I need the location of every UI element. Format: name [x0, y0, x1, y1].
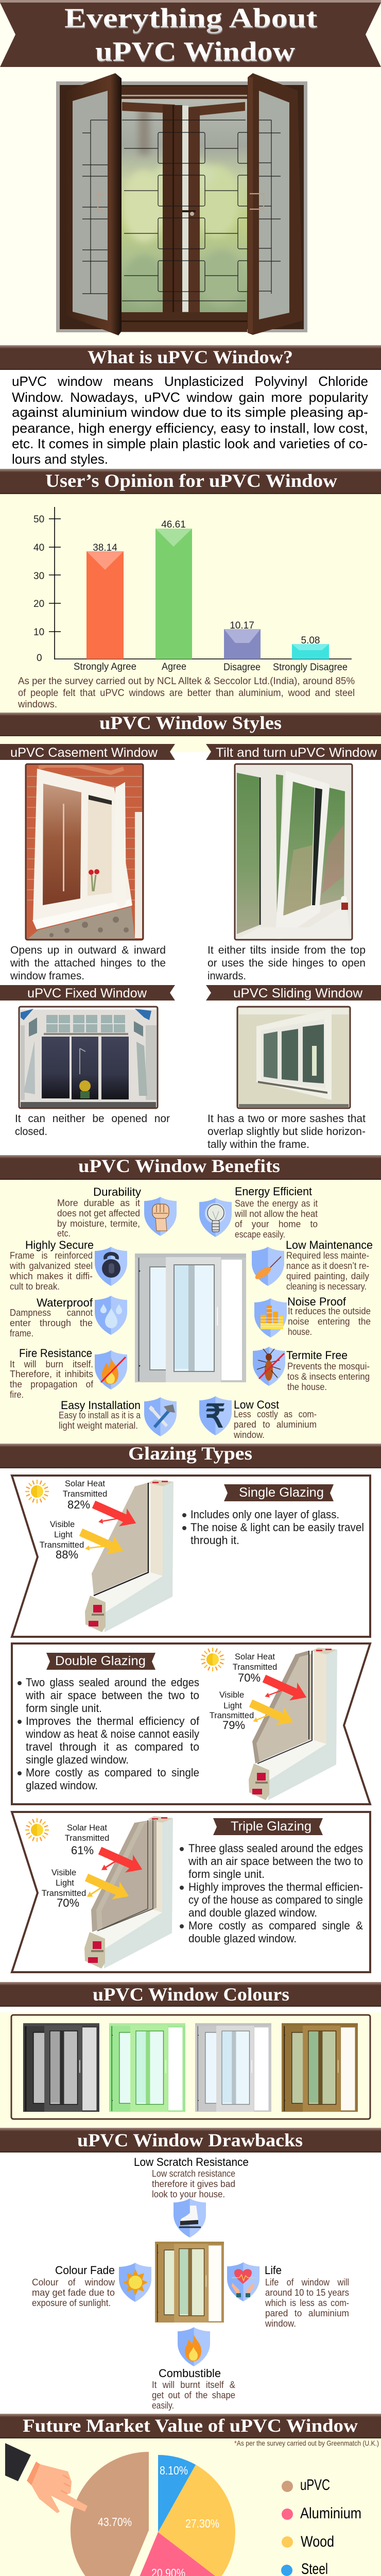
ribbon: Double Glazing — [46, 1653, 155, 1670]
pie chart: market share: 27.30% — [185, 2517, 219, 2530]
bullets: triple glazing: and double glazed window. — [188, 1906, 317, 1919]
icon: light bulb — [205, 1203, 226, 1232]
benefit: Energy Efficient: escape easily. — [235, 1229, 285, 1240]
cream notch between ribbons — [170, 744, 211, 752]
bar chart: user opinion — [33, 507, 352, 673]
ribbon: Tilt and turn uPVC Window: Tilt and turn uPVC Window — [216, 745, 377, 760]
panel: benefits background — [0, 1180, 381, 1444]
benefit: Energy Efficient: Energy Efficient — [235, 1185, 312, 1198]
drawback: Life — [227, 2262, 349, 2329]
section heading: uPVC Window Styles: uPVC Window Styles — [99, 713, 282, 733]
caption: fixed: It can neither be opened nor — [15, 1113, 170, 1125]
section heading: uPVC Window Colours — [0, 1982, 381, 2007]
icon: duster — [253, 1257, 281, 1281]
y axis with ticks: 40 — [33, 543, 44, 553]
image: gold sliding window (drawbacks centre) — [155, 2242, 224, 2323]
drawback: Combustible: easily. — [152, 2400, 174, 2411]
pie chart: market share: 8.10% — [160, 2464, 188, 2477]
benefit: Fire Resistance: the propagation of — [10, 1379, 94, 1389]
drawback: Low Scratch Resistance: look to your house. — [152, 2189, 225, 2199]
label: visible light 79%: Light — [223, 1701, 242, 1710]
benefit: Low Maintenance: cleaning is necessary. — [286, 1281, 367, 1292]
label: visible light 70%: 70% — [57, 1896, 79, 1909]
y axis with ticks — [33, 507, 352, 664]
caption: fixed: closed. — [15, 1126, 47, 1138]
label: visible light 70% — [42, 1868, 86, 1909]
benefit: Low Cost: pared to aluminium — [234, 1419, 317, 1430]
benefit: Noise Proof: Noise Proof — [287, 1295, 347, 1308]
label: visible light 88%: 88% — [56, 1548, 78, 1561]
icon: sun — [25, 1480, 49, 1503]
benefit: Highly Secure: Highly Secure — [25, 1239, 94, 1251]
caption: tilt and turn: inwards. — [207, 970, 246, 982]
label: visible light 79% — [210, 1690, 254, 1732]
icon: fist — [152, 1204, 169, 1231]
drawback: Colour Fade: exposure of sunlight. — [32, 2298, 111, 2308]
background: top ivory — [0, 0, 381, 345]
title banner — [0, 0, 381, 67]
section heading: What is uPVC Window? — [0, 345, 381, 370]
bullets: triple glazing: with an air space between the two to — [188, 1855, 363, 1868]
section heading: What is uPVC Window?: What is uPVC Window? — [88, 347, 293, 367]
benefit: Low Maintenance: Low Maintenance — [286, 1239, 373, 1251]
benefit: Highly Secure: with galvanized steel — [9, 1261, 93, 1271]
ribbon: Single Glazing — [224, 1484, 334, 1501]
icon: hammer and wrench — [149, 1404, 175, 1427]
bar: Agree 46.61: Agree — [162, 662, 186, 672]
ribbon: uPVC Casement Window: uPVC Casement Window — [10, 745, 158, 760]
benefit: Waterproof: Waterproof — [37, 1296, 93, 1309]
drawback: Colour Fade: Colour Fade — [55, 2264, 115, 2277]
legend: uPVC — [300, 2477, 330, 2494]
benefit: Easy Installation: light weight material. — [59, 1420, 138, 1431]
bullets: triple glazing: form single unit. — [188, 1868, 265, 1880]
drawback: Colour Fade: may get fade due to — [32, 2287, 115, 2298]
survey note: As per the survey carried out by NCL Alltek & Seccolor Ltd.(India), around 85% — [18, 676, 355, 687]
icon: heart in hands — [232, 2269, 255, 2297]
bullets: single glazing: The noise & light can be easily travel — [190, 1521, 364, 1534]
bar: Agree 46.61: 46.61 — [161, 519, 186, 530]
benefit: Low Cost: window. — [233, 1430, 265, 1440]
label: solar heat 82%: Transmitted — [63, 1489, 107, 1499]
icon: sun — [25, 1818, 49, 1842]
bar: Disagree 10.17: 10.17 — [230, 620, 254, 631]
drawback: Colour Fade — [32, 2263, 151, 2308]
survey note: of people felt that uPVC windows are better than aluminium, wood and steel — [18, 688, 355, 699]
ribbon: Single Glazing: Single Glazing — [239, 1485, 324, 1500]
benefit: Noise Proof: noise entering the — [288, 1316, 371, 1327]
window: green — [109, 2023, 185, 2112]
benefit: Low Maintenance — [252, 1239, 373, 1292]
benefit: Fire Resistance — [10, 1347, 127, 1400]
bullets: triple glazing: Three glass sealed around the edges — [188, 1842, 363, 1855]
window: white grey — [195, 2023, 271, 2112]
benefit: Highly Secure: which makes it diffi- — [9, 1271, 93, 1281]
benefit: Fire Resistance: fire. — [10, 1389, 24, 1400]
caption: casement — [10, 944, 166, 982]
label: visible light 79%: Visible — [219, 1690, 244, 1700]
drawback: Life: which is less as com- — [265, 2298, 349, 2308]
window: black — [23, 2023, 99, 2112]
bullets: double glazing: More costly as compared to single — [26, 1766, 199, 1779]
label: visible light 88%: Visible — [50, 1520, 75, 1529]
caption: casement: with the attached hinges to the — [10, 957, 166, 969]
section heading: Future Market Value — [0, 2414, 381, 2438]
label: solar heat 82%: Solar Heat — [65, 1479, 105, 1488]
benefit: Noise Proof — [254, 1295, 371, 1337]
panel: triple glazing — [12, 1812, 370, 1972]
section heading: uPVC Window Benefits — [0, 1155, 381, 1180]
drawback: Low Scratch Resistance: Low scratch resistance — [152, 2168, 235, 2179]
benefit: Easy Installation: Easy to install as it is a — [59, 1410, 141, 1420]
bar: Strongly Agree 38.14: 38.14 — [93, 543, 117, 553]
section heading: uPVC Window Styles — [0, 713, 381, 736]
drawback: Colour Fade: Colour of window — [32, 2277, 115, 2287]
bullets: triple glazing: Highly improves the thermal efficien- — [188, 1880, 363, 1893]
ribbon: Triple Glazing: Triple Glazing — [231, 1819, 311, 1834]
bullets: double glazing: Improves the thermal efficiency of — [26, 1715, 200, 1727]
benefit: Low Cost: Less costly as com- — [234, 1409, 317, 1419]
title banner: Everything About — [64, 3, 317, 33]
intro paragraph: Window. Nowadays, uPVC window gain more popularity — [12, 389, 368, 405]
icon: fire crossed out — [101, 1357, 126, 1384]
panel: colours background — [0, 2012, 381, 2128]
benefit: Noise Proof: house. — [288, 1327, 312, 1337]
section heading: uPVC Window Benefits: uPVC Window Benefits — [78, 1156, 280, 1176]
icon: kettlebell lock — [102, 1254, 120, 1278]
bullets: double glazing — [18, 1676, 200, 1792]
photo: sliding window — [237, 1007, 350, 1108]
section heading: User's Opinion: User’s Opinion for uPVC Window — [45, 470, 337, 491]
label: visible light 88% — [40, 1520, 84, 1561]
legend — [281, 2477, 361, 2576]
benefit: Energy Efficient: Save the energy as it — [235, 1198, 318, 1209]
pie chart: market share: 43.70% — [98, 2515, 132, 2529]
label: visible light 70%: Transmitted — [42, 1889, 86, 1898]
benefit: Fire Resistance: Fire Resistance — [19, 1347, 92, 1360]
section heading: uPVC Window Drawbacks: uPVC Window Drawbacks — [77, 2130, 303, 2150]
benefit: Durability: etc. — [57, 1228, 71, 1239]
bar: Strongly Disagree 5.08 — [273, 635, 348, 673]
ribbon: uPVC Sliding Window — [206, 985, 381, 1001]
section heading: uPVC Window Colours: uPVC Window Colours — [93, 1984, 289, 2005]
benefit: Waterproof: frame. — [10, 1328, 33, 1338]
intro paragraph: against aluminium window due to its simple pleasing ap- — [12, 404, 368, 420]
drawback: Life: Life of window will — [265, 2277, 349, 2287]
panel: colour swatches box — [11, 2015, 370, 2119]
icon: rupee: ₹ — [205, 1399, 226, 1434]
bullets: double glazing: with air space between the two to — [25, 1689, 199, 1702]
bullets: triple glazing — [180, 1842, 363, 1945]
photo: casement window in brick wall — [26, 764, 143, 940]
benefit: Termite Free — [253, 1347, 370, 1392]
bullets: triple glazing: More costly as compared single & — [188, 1919, 363, 1932]
bullets: double glazing: form single unit. — [26, 1702, 102, 1715]
section heading: Future Market Value: Future Market Value of uPVC Window — [23, 2415, 358, 2436]
drawback: Combustible — [152, 2327, 235, 2411]
benefit: Fire Resistance: Therefore, it inhibits — [10, 1369, 93, 1379]
benefit: Termite Free: Termite Free — [286, 1349, 348, 1362]
bar: Strongly Disagree 5.08: Strongly Disagree — [273, 662, 348, 673]
caption: casement: Opens up in outward & inward — [10, 944, 166, 956]
drawback: Low Scratch Resistance — [134, 2156, 249, 2238]
benefit: Highly Secure — [9, 1239, 127, 1292]
label: solar heat 61%: 61% — [71, 1844, 94, 1857]
icon: termite crossed out — [257, 1349, 284, 1381]
label: solar heat 61%: Solar Heat — [67, 1823, 107, 1833]
legend: Wood — [301, 2533, 334, 2550]
benefit: Waterproof: Dampness cannot — [10, 1308, 93, 1318]
bar: Strongly Disagree 5.08: 5.08 — [301, 635, 320, 646]
title banner: uPVC Window — [95, 36, 295, 67]
benefit: Low Cost — [199, 1396, 317, 1440]
bar: Strongly Agree 38.14 — [74, 543, 136, 672]
bullets: triple glazing: double glazed window. — [188, 1932, 297, 1945]
benefit: Energy Efficient: will not allow the heat — [234, 1209, 318, 1219]
survey note — [18, 676, 355, 710]
ribbon: uPVC Fixed Window — [0, 985, 175, 1001]
section heading: Glazing Types: Glazing Types — [128, 1443, 252, 1464]
caption: tilt and turn — [207, 944, 366, 982]
panel: single glazing — [12, 1476, 370, 1637]
label: solar heat 70%: Solar Heat — [235, 1652, 275, 1662]
icon: water drops — [100, 1304, 122, 1328]
benefit: Low Maintenance: Required less mainte- — [286, 1250, 369, 1261]
benefit: Durability: by moisture, termite, — [57, 1218, 140, 1229]
ribbon: Double Glazing: Double Glazing — [55, 1654, 146, 1668]
drawback: Life: Life — [265, 2264, 282, 2277]
benefit: Easy Installation: Easy Installation — [61, 1399, 141, 1412]
label: visible light 88%: Light — [54, 1530, 73, 1539]
section heading: Glazing Types — [0, 1443, 381, 1468]
label: solar heat 82%: 82% — [67, 1498, 90, 1511]
cream band under styles heading — [0, 736, 381, 744]
legend: Aluminium — [300, 2505, 361, 2522]
label: solar heat 70%: 70% — [238, 1671, 261, 1684]
bar: Strongly Agree 38.14: Strongly Agree — [74, 662, 136, 672]
bullets: double glazing: Two glass sealed around the edges — [26, 1676, 199, 1689]
drawback: Low Scratch Resistance: Low Scratch Resistance — [134, 2156, 249, 2168]
caption: sliding: It has a two or more sashes that — [207, 1113, 366, 1125]
benefit: Easy Installation — [59, 1397, 177, 1436]
ribbon: uPVC Fixed Window: uPVC Fixed Window — [27, 986, 147, 1001]
icon: pointing hand — [5, 2443, 88, 2513]
caption: tilt and turn: It either tilts inside from the top — [207, 944, 366, 956]
benefit: Low Maintenance: quired painting, daily — [286, 1271, 369, 1281]
label: visible light 70%: Visible — [51, 1868, 76, 1877]
hero image: open brown uPVC casement window — [56, 73, 307, 335]
drawback: Combustible: get out of the shape — [152, 2390, 235, 2400]
benefit: Fire Resistance: It will burn itself. — [10, 1359, 93, 1369]
bullets: double glazing: single glazed window. — [26, 1753, 129, 1766]
bullets: double glazing: travel through it as compared to — [26, 1740, 199, 1753]
intro paragraph: etc. It comes in simple plain plastic look and varieties of co- — [12, 436, 368, 451]
bullets: single glazing: through it. — [190, 1534, 239, 1547]
ribbon: uPVC Sliding Window: uPVC Sliding Window — [233, 986, 363, 1001]
label: solar heat 70% — [233, 1652, 277, 1684]
survey note: windows. — [18, 699, 57, 710]
label: visible light 88%: Transmitted — [40, 1540, 84, 1550]
drawback: Combustible: Combustible — [159, 2367, 221, 2380]
label: solar heat 70%: Transmitted — [233, 1663, 277, 1672]
benefit: Energy Efficient — [199, 1185, 318, 1240]
label: visible light 70%: Light — [56, 1878, 74, 1888]
bullets: double glazing: glazed window. — [26, 1779, 98, 1792]
drawback: Life: around 10 to 15 years — [265, 2287, 349, 2298]
drawback: Life: pared to aluminium — [265, 2308, 349, 2318]
intro paragraph: lours and styles. — [12, 451, 108, 467]
y axis with ticks: 10 — [33, 627, 44, 638]
benefit: Noise Proof: It reduces the outside — [288, 1306, 371, 1316]
benefit: Highly Secure: Frame is reinforced — [10, 1250, 93, 1261]
benefit: Durability: More durable as it — [57, 1198, 140, 1208]
y axis with ticks: 30 — [33, 571, 44, 582]
y axis with ticks: 0 — [37, 653, 42, 664]
y axis with ticks: 50 — [33, 514, 44, 525]
benefit: Termite Free: Prevents the mosqui- — [287, 1361, 370, 1371]
bullets: double glazing: window as heat & noise cannot easily — [25, 1727, 199, 1740]
bullets: single glazing: Includes only one layer of glass. — [190, 1508, 339, 1521]
photo: fixed bay window — [19, 1007, 158, 1108]
caption: sliding: tally within the frame. — [207, 1139, 309, 1150]
drawback: Life: window. — [265, 2318, 296, 2329]
label: solar heat 82% — [63, 1479, 107, 1511]
icon: sound bars — [261, 1306, 283, 1329]
benefit: Energy Efficient: of your home to — [235, 1219, 318, 1229]
section heading: User's Opinion — [0, 469, 381, 494]
caption: sliding: overlap slightly but slide horizon- — [207, 1126, 366, 1138]
ribbon: Triple Glazing — [213, 1818, 323, 1835]
bar: Disagree 10.17 — [223, 620, 261, 673]
icon: ice skate — [179, 2206, 201, 2227]
intro paragraph: uPVC window means Unplasticized Polyvinyl Chloride — [12, 374, 368, 389]
benefit: Waterproof — [10, 1296, 127, 1338]
image: grey sliding window (benefits centre) — [135, 1253, 246, 1382]
pie chart: market share — [71, 2452, 235, 2576]
caption: sliding — [207, 1113, 366, 1150]
bullets: single glazing — [182, 1508, 364, 1547]
window section: double glass — [249, 1648, 337, 1800]
intro paragraph: pearance, high energy efficiency, easy to install, low cost, — [12, 420, 368, 436]
bar: Disagree 10.17: Disagree — [223, 662, 261, 673]
caption: tilt and turn: or uses the side hinges to open — [207, 957, 366, 969]
y axis with ticks: 20 — [33, 599, 44, 609]
caption: fixed — [15, 1113, 170, 1138]
window: wood gold — [282, 2023, 358, 2112]
benefit: Low Cost: Low Cost — [234, 1398, 279, 1411]
benefit: Durability: Durability — [93, 1185, 141, 1198]
label: visible light 79%: Transmitted — [210, 1711, 254, 1720]
drawback: Combustible: It will burnt itself & — [152, 2380, 235, 2390]
window section: triple glass — [84, 1816, 173, 1969]
arrows: heat and light — [82, 1842, 146, 1905]
arrows: heat and light — [77, 1496, 140, 1560]
window section: single glass — [85, 1480, 174, 1632]
bar: Agree 46.61 — [155, 519, 192, 672]
label: solar heat 61%: Transmitted — [65, 1834, 109, 1843]
drawback: Low Scratch Resistance: therefore it gives bad — [152, 2179, 235, 2189]
benefit: Termite Free: the house. — [287, 1382, 327, 1392]
photo: tilt and turn window — [235, 764, 352, 943]
label: solar heat 61% — [65, 1823, 109, 1857]
icon: sun fade — [123, 2269, 148, 2296]
benefit: Durability — [57, 1185, 177, 1239]
intro paragraph — [12, 374, 368, 467]
bullets: triple glazing: cy of the house as compared to single — [188, 1893, 363, 1906]
panel: double glazing — [12, 1643, 370, 1804]
arrows: heat and light — [247, 1670, 310, 1731]
panel: user opinion chart background — [0, 494, 381, 713]
icon: sun — [201, 1648, 224, 1671]
label: visible light 79%: 79% — [222, 1719, 245, 1732]
benefit: Termite Free: tos & insects entering — [287, 1371, 370, 1382]
panel: market background — [0, 2438, 381, 2576]
benefit: Waterproof: enter through the — [10, 1318, 93, 1328]
icon: flame — [185, 2333, 201, 2361]
section heading: uPVC Window Drawbacks — [0, 2128, 381, 2153]
benefit: Durability: does not get affected — [57, 1208, 140, 1218]
benefit: Highly Secure: cult to break. — [10, 1281, 60, 1292]
caption: casement: window frames. — [10, 970, 84, 982]
benefit: Low Maintenance: nance as it doesn’t re- — [286, 1261, 369, 1271]
